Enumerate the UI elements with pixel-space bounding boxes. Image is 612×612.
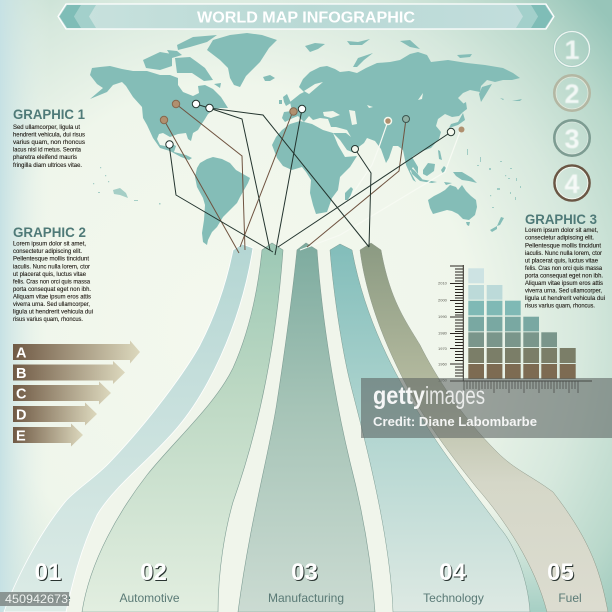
text block: graphic 1: GRAPHIC 1: [13, 107, 85, 122]
circle 2: 2: [564, 79, 580, 109]
madagascar: [345, 187, 353, 200]
year labels: 1970: [438, 346, 448, 351]
text block: graphic 3: Pellentesque mollis tincidunt: [525, 242, 601, 249]
circle 2: [554, 76, 590, 110]
southeast asia islands: [410, 150, 477, 185]
new zealand: [490, 217, 504, 232]
item 03: Manufacturing: [268, 591, 344, 605]
watermark panel: images: [425, 382, 485, 410]
text block: graphic 2: ligula ut hendrerit vehicula dui: [13, 309, 93, 316]
year labels: 2000: [438, 298, 448, 302]
text block: graphic 1: Sed ullamcorper, ligula ut: [13, 124, 80, 131]
pacific islands: [93, 149, 521, 208]
item 02: [119, 559, 180, 605]
year labels: 2010: [438, 280, 448, 286]
text block: graphic 3: ut placerat quis, luctus vitae: [525, 257, 598, 264]
text block: graphic 2: Aliquam vitae ipsum eros attis: [13, 294, 91, 301]
world map: [90, 33, 522, 245]
circle 3: 3: [564, 124, 580, 154]
arrow A: A: [16, 346, 27, 362]
japan: [449, 102, 467, 128]
circle 1: 1: [564, 35, 580, 65]
north america: [90, 66, 228, 160]
year labels: 1960: [438, 362, 448, 366]
text block: graphic 2: felis. Cras non orci quis massa: [13, 279, 90, 286]
sakhalin and kuriles: [479, 84, 522, 102]
text block: graphic 3: felis. Cras non orci quis massa: [525, 265, 602, 272]
arrow E: E: [16, 428, 26, 444]
text block: graphic 3: porta consequat eget non ibh.: [525, 272, 603, 279]
item 03: 03: [291, 559, 318, 586]
south america: [195, 157, 250, 245]
inland seas: [304, 82, 423, 125]
arrow B: B: [16, 366, 26, 382]
year labels: 1950: [438, 378, 448, 382]
text block: graphic 1: varius quam, non rhoncus: [13, 139, 85, 146]
text block: graphic 1: pharetra eleifend mauris: [13, 154, 77, 161]
canadian arctic islands: [143, 35, 221, 88]
connector lines: [164, 104, 451, 255]
ribbon numbers and labels: [13, 559, 582, 605]
image id tag: 450942673: [5, 594, 68, 606]
circle 3: [554, 120, 590, 156]
arrow list A to E: [13, 340, 140, 446]
year labels: 1990: [438, 314, 448, 319]
text block: graphic 1: [13, 107, 85, 169]
text block: graphic 2: viverra urna. Sed ullamcorper,: [13, 301, 90, 308]
brown connector lines: [164, 104, 406, 253]
item 05: Fuel: [558, 591, 582, 605]
text block: graphic 2: consectetur adipiscing elit.: [13, 248, 82, 255]
title banner: [58, 4, 554, 29]
watermark credit: Credit: Diane Labombarbe: [373, 414, 537, 429]
year labels: 1980: [438, 330, 448, 336]
ribbon 02: [82, 243, 283, 612]
text block: graphic 1: lacus nisl id metus. Seonta: [13, 147, 81, 154]
item 02: Automotive: [119, 591, 180, 605]
bars: [468, 268, 576, 379]
africa: [272, 121, 357, 214]
pale connector lines: [300, 121, 461, 250]
text block: graphic 2: porta consequat eget non ibh.: [13, 286, 91, 293]
text block: graphic 2: iaculis. Nunc nulla lorem, ctor: [13, 263, 91, 270]
item 04: [423, 559, 484, 605]
text block: graphic 3: [525, 212, 605, 310]
arctic russian islands: [305, 39, 472, 67]
watermark panel: [361, 378, 612, 438]
circle 1: [554, 32, 590, 66]
ribbon 05: [360, 243, 608, 612]
arrow D: D: [16, 408, 26, 424]
y axis ticks: [450, 265, 592, 381]
item 02: 02: [140, 559, 167, 586]
iceland: [263, 75, 275, 81]
circle 4: 4: [564, 169, 580, 199]
item 05: 05: [547, 559, 574, 586]
banner left chevrons: [60, 5, 96, 28]
numbered circles: [554, 32, 590, 200]
australia: [428, 185, 477, 226]
arrow C: C: [16, 386, 27, 402]
text block: graphic 2: Pellentesque mollis tincidunt: [13, 256, 89, 263]
text block: graphic 3: GRAPHIC 3: [525, 212, 597, 227]
text block: graphic 2: risus varius quam, rhoncus.: [13, 316, 83, 323]
banner right chevrons: [516, 5, 552, 28]
bar chart: [438, 265, 592, 393]
text block: graphic 3: ligula ut hendrerit vehicula dui: [525, 295, 605, 302]
gap bands between ribbons: [66, 248, 547, 612]
text block: graphic 2: Lorem ipsum dolor sit amet,: [13, 240, 86, 247]
text block: graphic 3: Lorem ipsum dolor sit amet,: [525, 227, 598, 234]
title: WORLD MAP INFOGRAPHIC: [197, 10, 415, 26]
item 03: [268, 559, 344, 605]
text block: graphic 1: fringilla diam ultrices vitae.: [13, 162, 82, 169]
text block: graphic 3: Aliquam vitae ipsum eros attis: [525, 280, 603, 287]
text block: graphic 2: [13, 225, 93, 323]
item 01: 01: [35, 559, 61, 586]
item 01: Agriculture: [13, 591, 71, 605]
text block: graphic 2: ut placerat quis, luctus vitae: [13, 271, 86, 278]
item 01: [13, 559, 71, 605]
text block: graphic 2: GRAPHIC 2: [13, 225, 86, 240]
circle 4: [554, 166, 590, 200]
item 04: 04: [439, 559, 466, 586]
text block: graphic 3: iaculis. Nunc nulla lorem, ctor: [525, 250, 603, 257]
ribbon 01: [4, 244, 253, 612]
text block: graphic 1: hendrerit vehicula, dui risus: [13, 132, 85, 138]
dark connector lines: [169, 104, 451, 255]
greenland: [207, 33, 277, 87]
map markers: [160, 100, 465, 152]
year labels: [438, 280, 448, 382]
watermark logo: getty: [373, 382, 425, 410]
x axis ticks: [464, 381, 578, 393]
ribbon 03: [238, 243, 375, 612]
item 05: [547, 559, 582, 605]
text block: graphic 3: viverra urna. Sed ullamcorper,: [525, 288, 602, 295]
eurasia: [282, 52, 520, 182]
text block: graphic 3: risus varius quam, rhoncus.: [525, 303, 595, 310]
item 04: Technology: [423, 591, 484, 605]
ribbon 04: [330, 244, 530, 612]
text block: graphic 3: consectetur adipiscing elit.: [525, 235, 594, 242]
british isles: [279, 94, 291, 106]
